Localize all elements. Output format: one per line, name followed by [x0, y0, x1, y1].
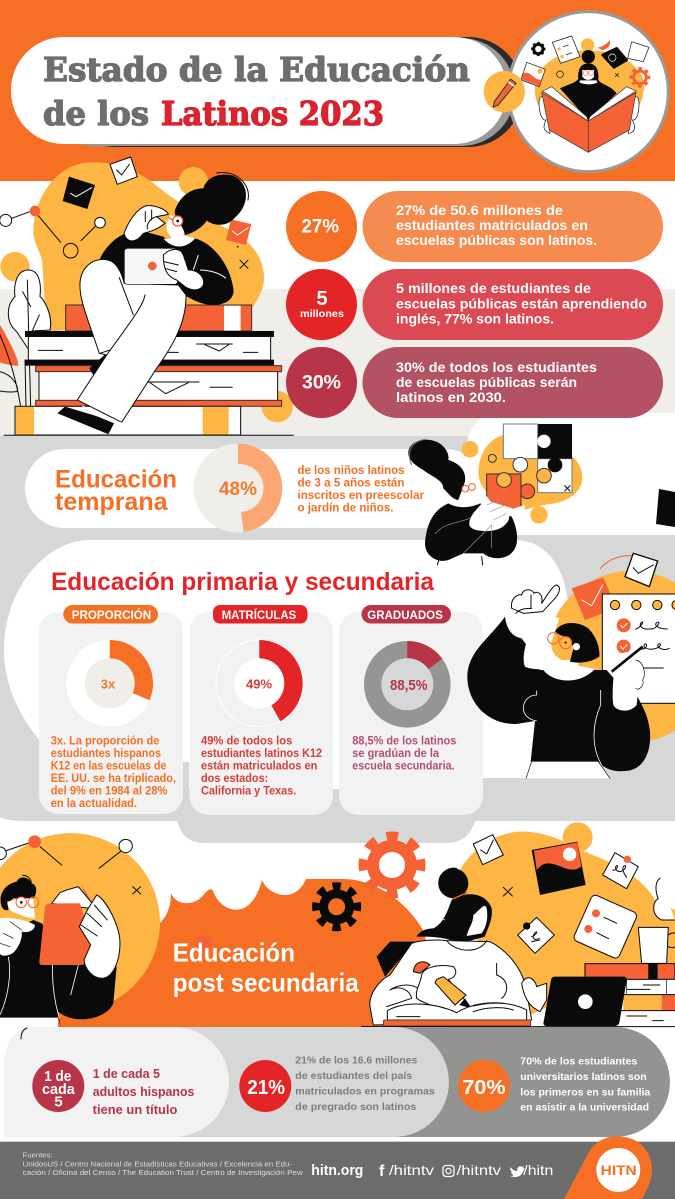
woman figure — [408, 439, 525, 565]
heading: Educación — [55, 466, 177, 494]
illustration: man reading — [0, 833, 160, 1027]
sources: UnidosUS / Centro Nacional de Estadísticas Educativas / Excelencia en Edu- — [23, 1159, 293, 1168]
stat text: de pregrado son latinos — [295, 1101, 416, 1113]
panel: educación post secundaria background — [58, 879, 450, 1027]
description: o jardín de niños. — [298, 500, 394, 514]
heading: temprana — [55, 488, 169, 516]
right book stack — [585, 964, 675, 1021]
stat text: estudiantes matriculados en — [396, 218, 588, 233]
icon: laptop — [543, 977, 627, 1026]
card: proporción — [39, 605, 183, 814]
description: dos estados: — [201, 771, 268, 785]
description: K12 en las escuelas de — [51, 758, 167, 772]
stat text: 5 millones de estudiantes de — [396, 281, 592, 296]
stat text: de escuelas públicas serán — [396, 375, 577, 390]
heading: Educación primaria y secundaria — [51, 568, 435, 596]
stat text — [396, 281, 647, 326]
stat text: 70% de los estudiantes — [520, 1055, 637, 1067]
stat text: de estudiantes del país — [295, 1070, 412, 1082]
stat row: 27% — [286, 191, 663, 262]
stat text: 30% de todos los estudiantes — [396, 360, 597, 375]
header illustration: reader in circle — [484, 12, 668, 172]
icon: open book — [39, 885, 95, 965]
stat: 70%: 70% — [462, 1077, 506, 1099]
donut chart: 88,5%: 88,5% — [390, 678, 428, 694]
icon: twitter bird — [510, 1166, 524, 1177]
description: de los niños latinos — [298, 463, 405, 477]
woman figure — [467, 585, 650, 778]
heading: educación post secundaria — [173, 935, 359, 998]
description: están matriculados en — [201, 758, 317, 772]
icon: plant — [0, 270, 51, 407]
donut chart: 48% — [194, 444, 282, 532]
description: 88,5% de los latinos — [352, 734, 457, 748]
icon: instagram — [443, 1166, 454, 1176]
stat text: 21% de los 16.6 millones — [295, 1054, 417, 1066]
title text: Latinos 2023 — [161, 94, 384, 133]
stat text: 1 de cada 5 — [93, 1067, 160, 1081]
description: 3x. La proporción de — [51, 734, 160, 748]
stat text: en asistir a la universidad — [520, 1101, 649, 1113]
heading: educación post secundaria: Educación — [173, 938, 295, 968]
stat row: 5 millones — [286, 269, 663, 340]
description: California y Texas. — [201, 784, 296, 798]
stats strip: post secundaria — [4, 1027, 670, 1137]
donut chart: 49% — [216, 640, 303, 727]
stat text: inglés, 77% son latinos. — [396, 312, 554, 326]
tag: GRADUADOS — [367, 608, 443, 622]
stat: 1 de cada 5: cada — [42, 1081, 75, 1098]
illustration: woman with checklist — [467, 553, 675, 778]
icon: network dots — [0, 835, 141, 894]
stat text: escuelas públicas son latinos. — [396, 233, 597, 248]
description: 49% de todos los — [201, 734, 293, 748]
title banner — [11, 37, 523, 147]
description — [201, 734, 322, 798]
social handles: /hitn — [523, 1162, 553, 1178]
stat row: 30%: 30% — [302, 372, 341, 394]
stat text: latinos en 2030. — [396, 390, 506, 405]
stat row: 30% — [286, 347, 663, 418]
stat text: tiene un título — [93, 1103, 178, 1117]
stat: 1 de cada 5: 1 de — [44, 1068, 71, 1085]
icon: puzzle — [487, 424, 572, 509]
social handles: f — [379, 1163, 385, 1180]
stat: 1 de cada 5: 5 — [54, 1094, 63, 1111]
social handles: /hitntv — [389, 1162, 434, 1178]
icon: network dots — [0, 206, 105, 258]
panel: educación primaria y secundaria — [39, 568, 483, 815]
social handles — [379, 1162, 553, 1180]
description — [51, 734, 176, 810]
website: hitn.org — [311, 1163, 363, 1179]
stat: 21%: 21% — [247, 1077, 285, 1099]
description: inscritos en preescolar — [298, 488, 424, 502]
panel: educación primaria y secundaria background — [4, 540, 568, 789]
donut chart: 49%: 49% — [246, 677, 272, 692]
sources: cación / Oficina del Censo / The Education Trust / Centro de Investigación Pew — [23, 1168, 303, 1177]
stat: 21% — [239, 1054, 435, 1113]
sources: Fuentes: — [23, 1151, 52, 1160]
title text: Estado de la Educación — [43, 50, 470, 89]
stacked books — [4, 305, 293, 435]
tag — [63, 605, 158, 624]
stat text — [295, 1054, 435, 1113]
donut chart: 3x: 3x — [101, 677, 116, 692]
man figure — [0, 875, 120, 1027]
heading: educación post secundaria: post secundaria — [173, 968, 359, 998]
footer — [0, 1136, 675, 1199]
stat text: matriculados en programas — [295, 1086, 435, 1098]
description: de 3 a 5 años están — [298, 476, 404, 490]
floating notes — [473, 835, 638, 960]
description: estudiantes hispanos — [51, 746, 161, 760]
title text — [43, 50, 470, 133]
card: matrículas — [190, 605, 333, 815]
description: estudiantes latinos K12 — [201, 746, 322, 760]
tag — [213, 605, 308, 624]
stat text: universitarios latinos son — [520, 1071, 647, 1083]
heading — [55, 466, 177, 516]
description — [298, 463, 424, 514]
stat text — [396, 360, 597, 405]
woman figure — [57, 172, 248, 434]
logo: HITN: HITN — [601, 1162, 637, 1178]
header band — [0, 0, 675, 181]
stat: 1 de cada 5 — [32, 1060, 194, 1117]
panel: educación temprana — [25, 444, 485, 532]
donut chart: 88,5% — [364, 641, 451, 728]
stat text — [396, 203, 597, 248]
illustration: woman studying at desk — [362, 822, 675, 1027]
stat row: 27%: 27% — [302, 216, 339, 238]
icon: black gear — [313, 883, 360, 930]
title text: de los — [43, 94, 149, 133]
donut chart: 48%: 48% — [219, 479, 257, 500]
logo: HITN — [564, 1136, 652, 1199]
description: del 9% en 1984 al 28% — [51, 784, 168, 798]
description — [352, 734, 457, 772]
icon: clipboard checklist — [602, 594, 675, 703]
stat text — [520, 1055, 650, 1113]
description: escuela secundaria. — [352, 758, 455, 772]
stat text: los primeros en su familia — [520, 1086, 650, 1098]
illustration: woman with puzzle — [408, 424, 582, 565]
donut chart: 3x — [66, 640, 153, 727]
icon: orange gear — [359, 832, 425, 898]
tag: PROPORCIÓN — [72, 607, 151, 622]
icon: pencil — [484, 71, 525, 112]
sources — [23, 1151, 303, 1177]
stat row: 5 millones: millones — [300, 309, 344, 320]
woman figure — [370, 868, 547, 1025]
stat row: 5 millones: 5 — [316, 288, 328, 310]
icon: check notes — [63, 157, 251, 268]
illustration: woman reading on books — [0, 157, 293, 435]
stat: 70% — [458, 1055, 650, 1113]
stat text — [93, 1067, 194, 1117]
tag: MATRÍCULAS — [222, 607, 296, 622]
stat text: adultos hispanos — [93, 1085, 194, 1099]
stat text: escuelas públicas están aprendiendo — [396, 296, 647, 312]
open book — [383, 1003, 531, 1026]
description: en la actualidad. — [51, 796, 137, 810]
description: EE. UU. se ha triplicado, — [51, 771, 176, 785]
card: graduados — [339, 605, 483, 815]
icon: black note at right edge — [656, 489, 675, 527]
icon: coffee cup — [638, 878, 675, 963]
tag — [362, 605, 451, 624]
stat text: 27% de 50.6 millones de — [396, 203, 564, 218]
description: se gradúan de la — [352, 746, 439, 760]
social handles: /hitntv — [457, 1162, 501, 1178]
